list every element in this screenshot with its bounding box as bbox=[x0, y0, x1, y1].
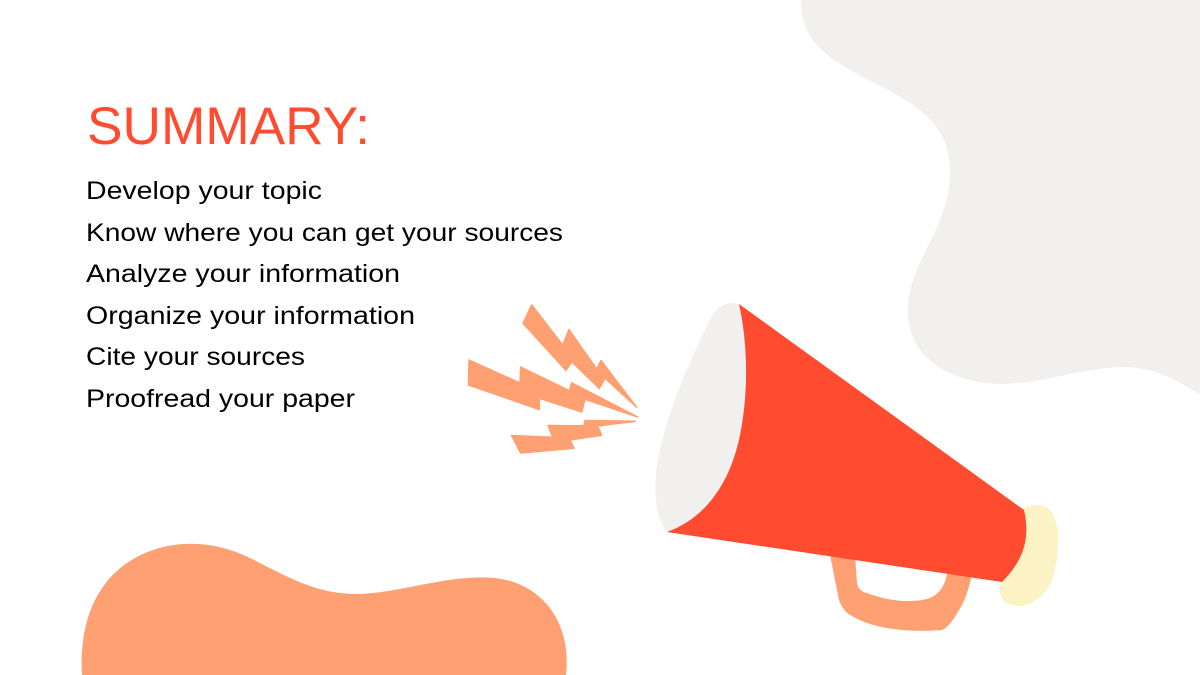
list item 2: Know where you can get your sources bbox=[86, 219, 563, 247]
list item 6: Proofread your paper bbox=[86, 385, 355, 413]
bolt: bottom bbox=[512, 420, 635, 453]
summary list bbox=[86, 177, 563, 413]
bolt: top bbox=[523, 305, 637, 407]
icon: sound bolts bbox=[468, 305, 638, 453]
megaphone handle bbox=[829, 550, 973, 631]
megaphone cone bbox=[667, 304, 1026, 582]
list item 5: Cite your sources bbox=[86, 343, 305, 371]
list item 1: Develop your topic bbox=[86, 177, 322, 205]
title: SUMMARY: bbox=[87, 97, 370, 156]
megaphone end cap bbox=[1000, 505, 1058, 606]
background blob: bottom left bbox=[82, 544, 567, 675]
list item 4: Organize your information bbox=[86, 302, 415, 330]
list item 3: Analyze your information bbox=[86, 260, 400, 288]
megaphone mouth bbox=[655, 303, 760, 532]
background blob: top right bbox=[801, 0, 1200, 395]
icon: megaphone bbox=[655, 303, 1058, 631]
bolt: middle bbox=[468, 360, 638, 417]
